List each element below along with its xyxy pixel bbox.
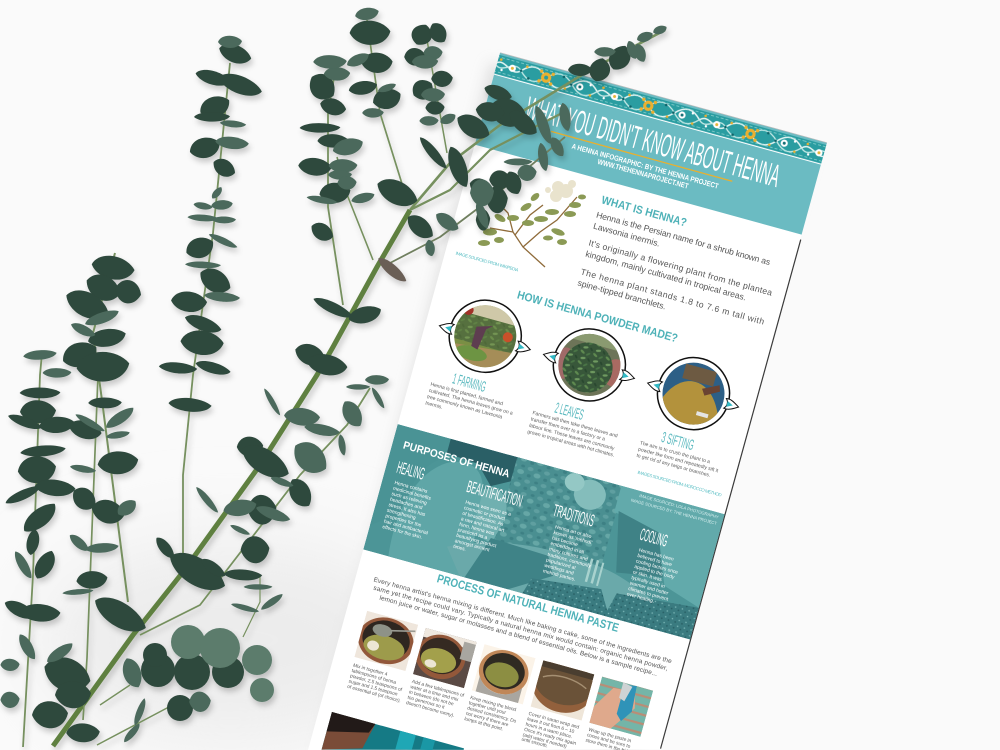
text: times. xyxy=(452,544,467,553)
ornament right xyxy=(515,341,532,355)
photo ring xyxy=(545,321,634,409)
caption: cones and be sure to xyxy=(586,732,631,750)
text: many cultures and xyxy=(548,546,589,563)
ornamental tile strip xyxy=(494,55,826,164)
caption: of essential oil (of choice). xyxy=(346,684,402,704)
text: medicinal benefits xyxy=(392,486,432,502)
photo xyxy=(530,660,594,720)
caption: not worry if there are xyxy=(465,711,509,728)
text: or skin. It was xyxy=(632,569,663,583)
text: weddings and xyxy=(544,563,575,577)
caption: lumps at this point. xyxy=(464,716,504,732)
text: cooling factors once xyxy=(635,558,679,576)
mid-green leaves xyxy=(0,6,668,744)
caption: transfer them over to a factory or a xyxy=(530,416,606,443)
ornament right xyxy=(620,370,636,383)
photo xyxy=(410,627,477,688)
text xyxy=(452,500,512,562)
text: headaches and xyxy=(389,497,423,511)
step 2 leaves xyxy=(527,328,636,457)
caption: together until your xyxy=(468,700,507,716)
heading: HOW IS HENNA POWDER MADE? xyxy=(516,289,679,345)
leaves xyxy=(478,191,586,246)
caption: desired consistency. Do xyxy=(466,705,517,725)
caption: Mix in together 4 xyxy=(352,663,388,678)
subtitle: A HENNA INFOGRAPHIC: BY THE HENNA PROJECT xyxy=(571,142,720,191)
column: cooling xyxy=(623,525,688,609)
text: traditions, commonly xyxy=(547,552,592,570)
text: stress. It also has xyxy=(388,502,426,518)
stems xyxy=(490,197,577,267)
body text: The henna plant stands 1.8 to 7.6 m tall with xyxy=(580,267,766,327)
column: beautification xyxy=(450,477,525,564)
bottom photo: henna artist xyxy=(322,712,464,750)
caption: tablespoons of henna xyxy=(351,668,397,686)
recipe step 5 xyxy=(584,676,653,750)
caption: tree commonly known as Lawsonia xyxy=(426,394,503,421)
text: climates to prevent xyxy=(628,586,669,603)
column: traditions xyxy=(536,501,606,586)
body text: Lawsonia inermis. xyxy=(592,221,661,249)
caption: hours in a warm place. xyxy=(525,722,573,740)
text: strengthening xyxy=(386,508,417,521)
image credit: IMAGE SOURCED BY: THE HENNA PROJECT xyxy=(630,497,718,526)
sheet edge lines xyxy=(333,53,827,749)
text xyxy=(382,480,439,542)
caption xyxy=(425,382,515,429)
dry brown leaf xyxy=(375,254,409,286)
ornament left xyxy=(646,378,663,392)
heading: WHAT IS HENNA? xyxy=(600,194,688,229)
caption xyxy=(464,695,520,735)
step 1 farming xyxy=(426,299,532,419)
panel: purposes of henna xyxy=(363,424,725,640)
text: amongst ancient xyxy=(454,538,491,554)
text: Henna art or also xyxy=(554,524,592,540)
text: known as 'mehndi' xyxy=(553,530,593,546)
text: hair and antibacterial xyxy=(383,519,428,536)
section: how is henna powder made xyxy=(426,290,740,496)
title underline xyxy=(551,131,732,181)
text: form, henna was xyxy=(459,522,496,537)
body text: kingdom, mainly cultivated in tropical areas. xyxy=(585,249,747,302)
henna plant illustration xyxy=(478,180,586,267)
panel: purposes of henna: BEAUTIFICATION xyxy=(465,477,525,511)
caption: Wrap up the paste in xyxy=(588,727,632,745)
photo ring xyxy=(649,349,738,438)
subtitle: WWW.THEHENNAPROJECT.NET xyxy=(597,157,690,191)
stems xyxy=(23,20,665,747)
recipe step 3 xyxy=(463,644,536,736)
caption: Once it's ready mix again xyxy=(523,727,577,747)
recipe step 4 xyxy=(522,660,594,749)
caption: too generous so it xyxy=(407,695,446,711)
flower cluster xyxy=(545,180,576,202)
step 3 sifting xyxy=(636,356,740,477)
photo ring xyxy=(441,292,530,381)
eucalyptus plant foreground xyxy=(0,6,668,747)
section: process of natural henna paste xyxy=(322,574,672,750)
section: what is henna xyxy=(455,161,786,339)
caption: Inermis. xyxy=(425,400,443,411)
text: of beautification. As xyxy=(462,511,505,528)
photo xyxy=(589,676,653,737)
caption: sugar and 1.5 teaspoon xyxy=(348,678,398,698)
text: believed to have xyxy=(637,553,673,568)
step 1 farming: 1 FARMING xyxy=(451,370,488,396)
caption: to get rid of any twigs or branches. xyxy=(636,453,711,479)
caption: Farmers will then take these leaves and xyxy=(532,410,618,439)
duotone hands photo xyxy=(363,424,725,640)
caption: The aim is to crush the plant to a xyxy=(639,440,711,465)
caption: labour line. These leaves are commonly xyxy=(528,423,615,452)
ornament left xyxy=(438,321,454,334)
column: cooling: COOLING xyxy=(638,525,670,551)
recipe step 1 xyxy=(348,611,418,703)
heading: PURPOSES OF HENNA xyxy=(402,440,511,480)
caption: cultivated. The henna leaves grow on a xyxy=(428,388,514,417)
photo xyxy=(472,644,536,704)
infographic sheet xyxy=(308,53,827,750)
header band xyxy=(475,53,827,235)
intro text: lemon juice or water, sugar or molasses and a blend of essential oils. Below is a sample recipe... xyxy=(379,595,658,678)
intro text: Every henna artist's henna mixing is different. Much like baking a cake, some of the ingredients are the xyxy=(373,576,673,665)
photo: leaves in hand xyxy=(558,334,620,396)
text xyxy=(542,524,600,586)
text: a raw and natural art xyxy=(460,516,505,534)
caption: Henna is first planted, farmed and xyxy=(430,382,504,407)
body text xyxy=(577,210,781,338)
intro text: same yet the recipe could vary. Typically a natural henna mix would contain: organic henna powder, xyxy=(373,585,669,673)
column: healing: HEALING xyxy=(395,458,427,484)
caption: until smooth. xyxy=(521,736,549,749)
caption: powder, 2.5 teaspoons of xyxy=(349,673,403,693)
text: over heating. xyxy=(626,591,655,605)
image credit: IMAGES SOURCED FROM: MOROCCO METHOD xyxy=(637,470,722,498)
photo xyxy=(352,610,419,671)
heading: PROCESS OF NATURAL HENNA PASTE xyxy=(435,571,620,635)
caption: in between (do not be xyxy=(408,689,455,708)
caption: (add water if needed) xyxy=(522,732,568,750)
caption: powder like form and repeatedly sift it xyxy=(637,447,719,474)
column: healing xyxy=(380,458,445,542)
ornament right xyxy=(724,398,740,412)
dark leaves xyxy=(2,20,635,742)
text: embedded in all xyxy=(550,541,585,556)
text: cosmetic or product xyxy=(463,505,506,522)
step 3 sifting: 3 SIFTING xyxy=(660,429,696,454)
sheet paper xyxy=(308,53,827,750)
text: beautifying product xyxy=(455,533,498,550)
recipe step 2 xyxy=(406,628,477,718)
caption xyxy=(527,410,620,459)
text: such as relieving xyxy=(391,491,428,507)
text: applied to the body xyxy=(634,564,676,581)
text: mehndi parties. xyxy=(542,568,576,583)
caption xyxy=(346,663,407,704)
step 2 leaves: 2 LEAVES xyxy=(553,400,585,424)
caption xyxy=(521,711,581,750)
text: has become xyxy=(551,535,579,548)
body text: spine-tipped branchlets. xyxy=(577,278,667,311)
body text: Henna is the Persian name for a shrub known as xyxy=(595,210,771,267)
caption: Cover in saran wrap and xyxy=(528,711,580,731)
image credit: IMAGE SOURCED: LOLA PHOTOGRAPHY xyxy=(639,493,719,520)
text: effects for the skin. xyxy=(382,524,423,541)
text xyxy=(626,547,682,609)
caption: Add a few tablespoons of xyxy=(411,679,465,699)
text: warmer and hotter xyxy=(629,580,669,597)
text: practiced as a xyxy=(457,527,488,541)
text: Henna was seen as a xyxy=(465,500,512,518)
image credit: IMAGE SOURCED FROM WIKIPEDIA xyxy=(455,251,519,273)
text: Henna has been xyxy=(638,547,675,563)
photo: sifting powder xyxy=(662,362,724,425)
photo: field workers xyxy=(454,305,516,368)
text: properties for the xyxy=(385,513,422,529)
ornament left xyxy=(542,349,558,363)
column: traditions: TRADITIONS xyxy=(551,501,597,530)
text: typically used in xyxy=(631,575,666,590)
text: Henna contains xyxy=(394,480,429,495)
caption: Keep mixing the blend xyxy=(469,695,517,713)
caption xyxy=(585,727,637,750)
caption: grown in tropical areas with hot climates. xyxy=(527,429,615,459)
body text: It's originally a flowering plant from the plantea xyxy=(588,238,774,298)
caption xyxy=(405,679,465,720)
caption: leave it out from 6 – 10 xyxy=(526,716,575,735)
caption: doesn't become runny). xyxy=(405,700,455,719)
text: popularized at xyxy=(545,557,577,571)
caption xyxy=(636,440,721,481)
caption: water at a time and mix xyxy=(410,684,460,703)
